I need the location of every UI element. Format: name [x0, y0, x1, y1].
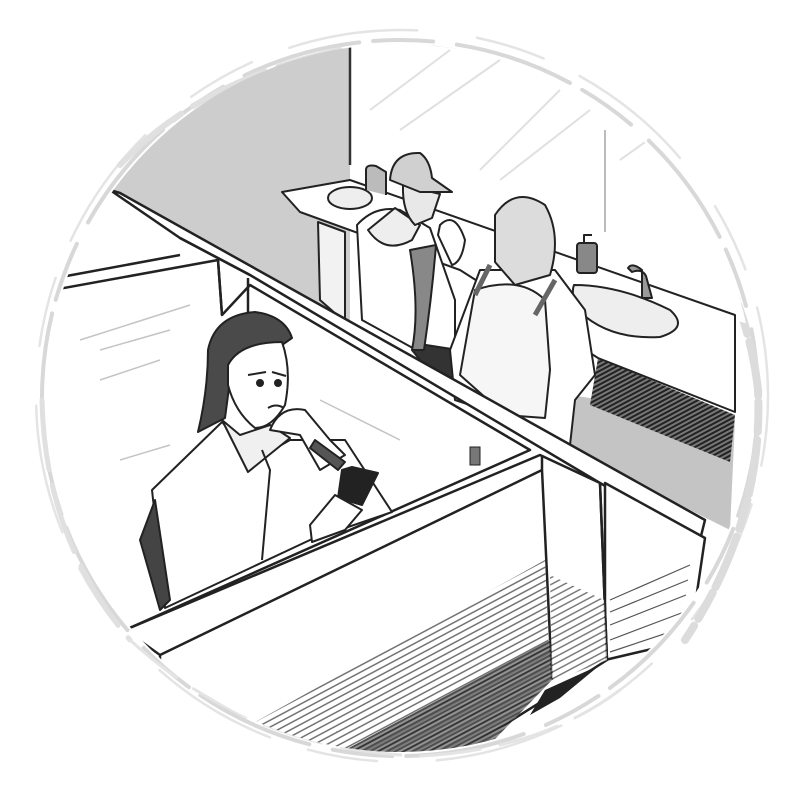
counter and sinks [282, 166, 735, 412]
far left stall floor [50, 195, 180, 280]
left stall wall [63, 236, 532, 628]
person in cap and hoodie [357, 153, 465, 378]
man with phone [140, 312, 392, 610]
hinge [470, 447, 480, 465]
dark shadow under right counter [590, 358, 735, 462]
grey floor [565, 395, 735, 530]
mirror [348, 45, 746, 324]
hatching [250, 560, 550, 760]
front partition [130, 454, 608, 752]
person in hood with backpack [450, 197, 595, 445]
grey back wall [113, 48, 350, 320]
main partition with door edge [110, 190, 705, 660]
